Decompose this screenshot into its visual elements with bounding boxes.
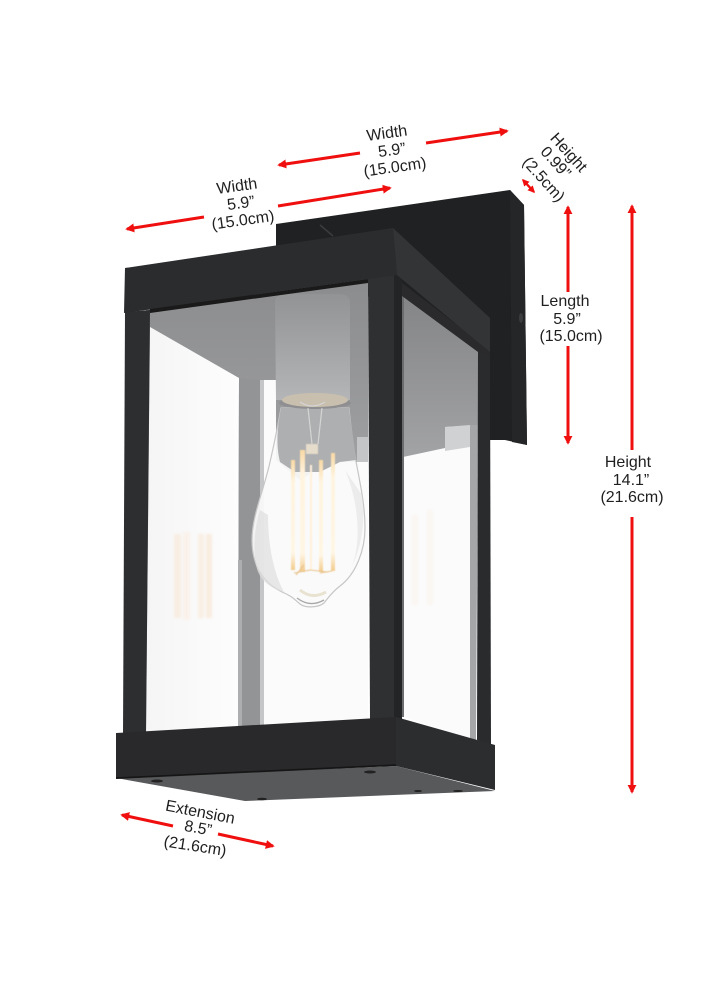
- label: upper width: (15.0cm): [363, 155, 427, 181]
- dimension: lower width: [127, 175, 390, 234]
- dimension: overall height: [600, 206, 664, 792]
- filaments: [291, 444, 335, 575]
- label: length: (15.0cm): [539, 328, 603, 345]
- label: upper width: 5.9”: [377, 140, 407, 161]
- label: length: Length: [541, 293, 589, 310]
- label: length: [539, 293, 603, 345]
- lantern product photo: [116, 190, 527, 801]
- label: height: 14.1”: [613, 472, 649, 489]
- dimension: plate height: [519, 130, 590, 206]
- wall mounting back plate: [276, 190, 527, 445]
- label: upper width: Width: [366, 122, 408, 145]
- label: height: Height: [605, 454, 652, 471]
- arrow: height up: [630, 206, 634, 450]
- arrow: lower width right: [278, 188, 390, 206]
- label: plate height: 0.99”: [537, 144, 574, 182]
- arrow: length up: [566, 207, 570, 292]
- arrow: upper width left: [279, 153, 360, 165]
- arrow: extension right: [218, 834, 273, 846]
- label: lower width: [211, 175, 275, 234]
- centre frame post: [368, 274, 402, 720]
- bulb base collar: [279, 397, 351, 409]
- label: plate height: [519, 130, 590, 206]
- label: lower width: (15.0cm): [211, 208, 275, 234]
- label: extension: 8.5”: [183, 818, 213, 840]
- light bulb: [252, 393, 365, 607]
- arrow: plate height: [523, 180, 534, 192]
- socket cylinder reflection: [275, 294, 350, 400]
- label: extension: Extension: [164, 798, 236, 828]
- arrow: upper width right: [426, 131, 507, 143]
- label: plate height: Height: [546, 130, 590, 176]
- label: upper width: [363, 122, 427, 181]
- label: lower width: 5.9”: [226, 193, 256, 214]
- dimension: plate length: [539, 207, 603, 443]
- left frame post: [123, 310, 150, 735]
- bottom base tray: [116, 717, 495, 801]
- label: plate height: (2.5cm): [519, 154, 568, 206]
- label: extension: (21.6cm): [163, 833, 228, 860]
- dimension: extension: [122, 798, 273, 860]
- label: height: [600, 454, 664, 506]
- reflected filament glow: [174, 532, 212, 620]
- label: lower width: Width: [216, 175, 258, 198]
- label: height: (21.6cm): [600, 489, 664, 506]
- arrow: length down: [566, 346, 570, 443]
- label: length: 5.9”: [553, 311, 581, 328]
- arrow: extension left: [122, 815, 173, 826]
- right rear frame post: [477, 350, 491, 745]
- arrow: lower width left: [127, 217, 204, 229]
- label: extension: [163, 798, 236, 860]
- arrow: height down: [630, 517, 634, 792]
- dimension: upper width: [279, 122, 507, 181]
- rear frame post seen through glass: [238, 378, 264, 730]
- front glass pane with interior reflection: [144, 270, 368, 735]
- top cap: [124, 228, 490, 352]
- right side glass pane: [402, 283, 490, 742]
